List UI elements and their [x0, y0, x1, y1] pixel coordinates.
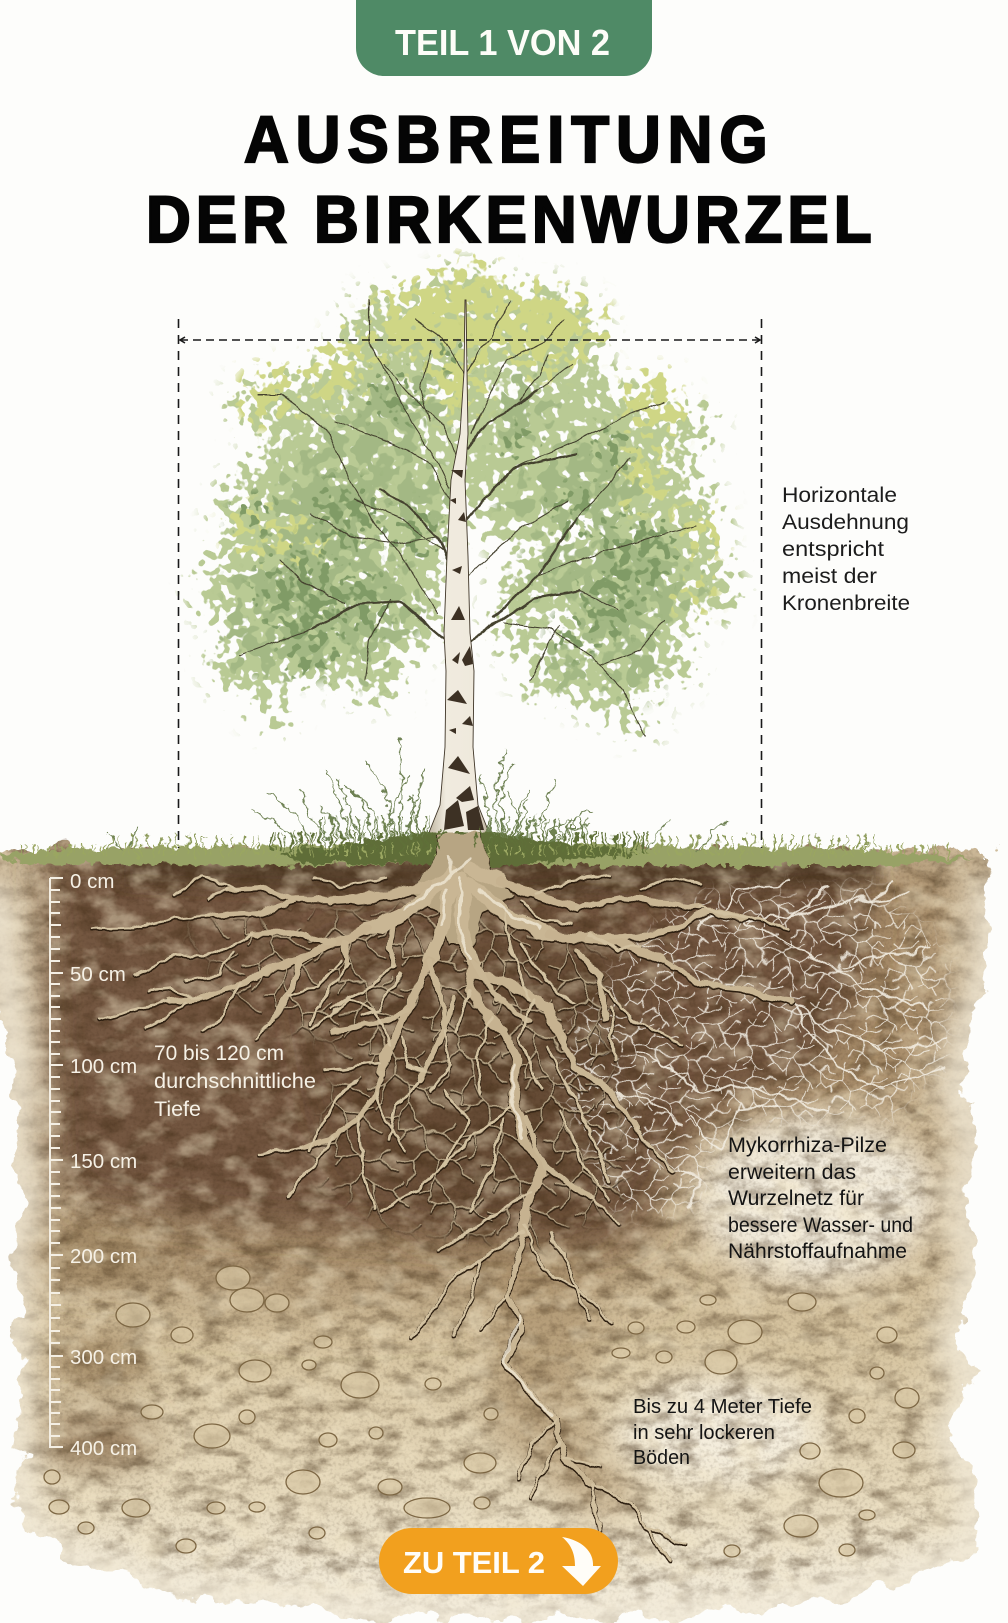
dark topsoil layer	[42, 850, 870, 1250]
note: horizontal spread: entspricht	[782, 538, 884, 561]
note: horizontal spread: Ausdehnung	[782, 511, 909, 534]
note: maximum depth: Böden	[633, 1447, 690, 1469]
fine rootlets	[93, 875, 790, 1560]
patch behind 300 cm	[45, 1334, 155, 1390]
stones in the subsoil	[44, 1266, 919, 1557]
patch behind 200 cm	[38, 1242, 142, 1292]
note: average depth: 70 bis 120 cm	[154, 1042, 284, 1065]
button: Zu Teil 2	[379, 1528, 618, 1594]
soil base tone	[0, 840, 1008, 1623]
note: average depth: Tiefe	[154, 1098, 201, 1121]
note: horizontal spread	[782, 484, 910, 615]
badge: Teil 1 von 2	[356, 0, 652, 76]
depth labels: 400 cm	[70, 1437, 137, 1460]
medium roots	[267, 883, 661, 1233]
soil cross-section	[0, 840, 1008, 1623]
birch bark markings	[444, 470, 484, 830]
depth ruler	[50, 870, 137, 1460]
patch behind 400 cm	[35, 1412, 155, 1468]
note: mycorrhiza fungi	[728, 1134, 913, 1263]
note: maximum depth	[633, 1396, 812, 1469]
note: mycorrhiza fungi: Wurzelnetz für	[728, 1187, 864, 1210]
root system	[93, 832, 791, 1560]
main fungal strands	[611, 885, 950, 1210]
depth labels: 150 cm	[70, 1150, 137, 1173]
thick main roots	[367, 868, 551, 963]
note: mycorrhiza fungi: erweitern das	[728, 1161, 856, 1184]
halo along the tap root	[480, 1240, 640, 1525]
depth labels: 300 cm	[70, 1346, 137, 1369]
foliage of the birch crown	[200, 268, 732, 734]
soil mottling	[0, 840, 1008, 1623]
note: mycorrhiza fungi: bessere Wasser- und	[728, 1214, 913, 1237]
button: Zu Teil 2: ZU TEIL 2	[403, 1545, 545, 1580]
tap root and secondary roots	[167, 888, 791, 1483]
trunk of the birch	[426, 300, 492, 840]
tall grass tufts	[110, 740, 730, 850]
light patch behind tap root text	[618, 1378, 822, 1486]
mycorrhiza fungal network	[545, 874, 957, 1226]
branches of the birch	[239, 300, 694, 736]
note: horizontal spread: Horizontale	[782, 484, 897, 507]
depth labels: 50 cm	[70, 963, 126, 986]
depth labels: 0 cm	[70, 870, 114, 893]
depth labels	[70, 870, 137, 1460]
note: average depth: durchschnittliche	[154, 1070, 316, 1093]
mid brown layer on the right	[681, 860, 954, 1150]
pale watercolor rim of the soil	[0, 880, 990, 1620]
note: mycorrhiza fungi: Nährstoffaufnahme	[728, 1240, 907, 1263]
transition band between topsoil and subsoil	[40, 1190, 660, 1300]
dark shading around the roots	[338, 940, 628, 1218]
note: maximum depth: in sehr lockeren	[633, 1422, 775, 1444]
depth labels: 200 cm	[70, 1245, 137, 1268]
note: maximum depth: Bis zu 4 Meter Tiefe	[633, 1396, 812, 1418]
width dimension line with crown extent	[178, 319, 762, 848]
depth labels: 100 cm	[70, 1055, 137, 1078]
fine root net	[100, 860, 660, 1280]
fine soil grain	[0, 840, 1008, 1623]
darkest layer near the surface	[120, 856, 880, 896]
soil highlights	[0, 1230, 1008, 1623]
title	[146, 102, 872, 256]
root crown	[408, 832, 512, 945]
grass strip along the soil surface	[0, 740, 975, 872]
darker grass beside the trunk	[280, 832, 640, 872]
note: mycorrhiza fungi: Mykorrhiza-Pilze	[728, 1134, 887, 1157]
badge: Teil 1 von 2: TEIL 1 VON 2	[395, 22, 610, 63]
grass clumps over the trunk base	[408, 826, 504, 852]
title: AUSBREITUNG	[244, 102, 768, 176]
title: DER BIRKENWURZEL	[146, 182, 872, 256]
light patch behind fungi text	[697, 1116, 933, 1280]
note: horizontal spread: meist der	[782, 565, 877, 588]
grass blades	[20, 828, 950, 850]
note: average depth	[154, 1042, 316, 1121]
root highlights	[405, 858, 552, 1416]
icon: curved arrow	[562, 1537, 601, 1586]
note: horizontal spread: Kronenbreite	[782, 592, 910, 615]
